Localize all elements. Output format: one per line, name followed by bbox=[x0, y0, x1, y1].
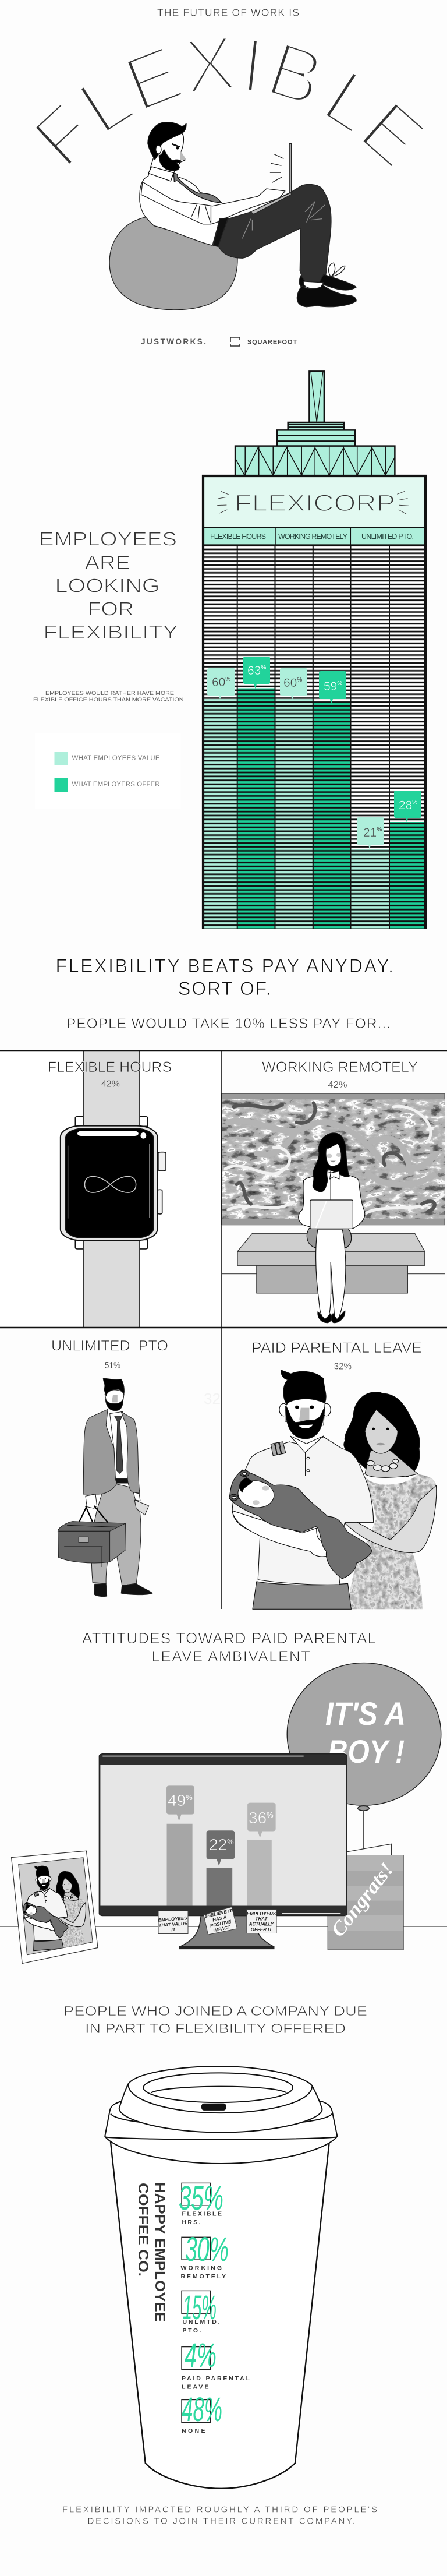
placket bbox=[305, 1446, 306, 1476]
value: 49%: 49 bbox=[168, 1791, 186, 1809]
bubble shape 36% bbox=[247, 1803, 276, 1838]
watch crown buttons bbox=[158, 1152, 166, 1171]
baby face bbox=[233, 1477, 279, 1511]
family picture in frame bbox=[23, 1865, 86, 1952]
illustration: congrats card bbox=[327, 1844, 403, 1950]
neck bbox=[331, 1163, 339, 1175]
screen glints bbox=[102, 1756, 340, 1914]
text: rather have flexible hours than vacation: EMPLOYEES WOULD RATHER HAVE MORE bbox=[45, 690, 174, 697]
bar: unlimited PTO employers offer 28% bbox=[389, 822, 425, 929]
collar bbox=[290, 1436, 324, 1452]
baby frog eyes bbox=[229, 1470, 249, 1501]
title: FLEXIBLE arched lettering bbox=[17, 19, 441, 184]
logo: Squarefoot bbox=[230, 337, 297, 346]
skirt bbox=[307, 1228, 352, 1248]
bubble 21%: 21 bbox=[363, 826, 377, 839]
title: FLEXIBLE arched lettering: I bbox=[237, 22, 268, 110]
bag tag bbox=[79, 1537, 88, 1543]
boarding pass bbox=[134, 1500, 149, 1515]
illustration: coffee cup bbox=[105, 2066, 337, 2489]
cheeks bbox=[327, 1153, 341, 1158]
balloon text: it's a boy: IT'S A bbox=[325, 1695, 406, 1732]
title: FLEXIBLE arched lettering: L bbox=[64, 55, 147, 151]
mother face bbox=[365, 1410, 398, 1453]
sticky note: employees that value it: THAT VALUE bbox=[158, 1921, 188, 1928]
panel: unlimited PTO bbox=[51, 1338, 168, 1597]
buttons bbox=[307, 1457, 310, 1459]
shirt bbox=[140, 168, 222, 245]
illustration: man with travel bag bbox=[58, 1378, 152, 1597]
shoes bbox=[318, 1311, 345, 1323]
father trousers bbox=[253, 1582, 351, 1609]
bubble 60%: % bbox=[297, 677, 302, 683]
exercise ball bbox=[109, 217, 237, 310]
face bbox=[326, 1144, 341, 1166]
checkbox labels bbox=[180, 2210, 250, 2434]
lid flange bbox=[105, 2101, 337, 2164]
card stripes bbox=[328, 1855, 403, 1931]
watch case bbox=[61, 1126, 157, 1240]
ear bbox=[156, 145, 161, 154]
face bbox=[105, 1390, 124, 1407]
hair bbox=[313, 1133, 349, 1192]
bubble 60% bbox=[207, 668, 235, 700]
lid dome bbox=[119, 2066, 322, 2133]
value: 36%: % bbox=[267, 1811, 274, 1819]
title: FLEXIBLE arched lettering: B bbox=[258, 25, 334, 123]
faint ghost number: 32 bbox=[204, 1390, 221, 1407]
bubble 60%: % bbox=[225, 676, 230, 683]
heading: flexibility beats pay anyday: FLEXIBILITY BEATS PAY ANYDAY. bbox=[56, 955, 393, 976]
upper tier bbox=[277, 422, 355, 446]
illustration: monitor with bar chart bbox=[99, 1754, 347, 1949]
illustration: woman with laptop on a bench before a painting bbox=[222, 1093, 445, 1323]
father torso bbox=[232, 1437, 374, 1585]
illustration: balloon bbox=[287, 1663, 441, 1856]
sip hole bbox=[202, 2104, 226, 2110]
illustration: man on exercise ball with laptop bbox=[109, 143, 356, 310]
label: working remotely: REMOTELY bbox=[180, 2273, 226, 2280]
grid vertical divider bbox=[221, 1051, 222, 1609]
lips bbox=[330, 1161, 336, 1162]
label: paid parental leave: PAID PARENTAL LEAVE bbox=[251, 1340, 422, 1356]
crown bbox=[235, 446, 395, 476]
heading: people who joined a company: PEOPLE WHO JOINED A COMPANY DUE bbox=[63, 2003, 367, 2019]
stand base bbox=[180, 1947, 274, 1949]
bar: unlimited PTO employees value 21% bbox=[350, 849, 389, 929]
sticky note: employers that actually offer it: THAT bbox=[256, 1917, 268, 1921]
abstract painting bbox=[222, 1099, 445, 1219]
heading: attitudes toward paid parental leave bbox=[82, 1629, 376, 1665]
heading: employees are looking for flexibility: LOOKING bbox=[55, 574, 159, 597]
father arm bbox=[232, 1511, 338, 1557]
bubble 21%: % bbox=[377, 827, 382, 833]
neck and face bbox=[150, 132, 186, 173]
kicker: the future of work is: THE FUTURE OF WORK IS bbox=[157, 7, 299, 19]
mother's fingers bbox=[271, 1442, 286, 1456]
father eyes bbox=[295, 1406, 314, 1409]
logo: Justworks: JUSTWORKS. bbox=[141, 337, 206, 346]
building outer walls bbox=[203, 476, 425, 929]
heading: attitudes toward paid parental leave: ATTITUDES TOWARD PAID PARENTAL bbox=[82, 1629, 376, 1647]
infinity symbol bbox=[84, 1177, 136, 1192]
title: FLEXIBLE arched lettering: E bbox=[113, 29, 193, 129]
value: 4%: 4% bbox=[185, 2337, 217, 2374]
baby hair bbox=[240, 1478, 252, 1492]
column header: flexible hours: FLEXIBLE HOURS bbox=[210, 532, 266, 541]
legend: employees value: WHAT EMPLOYEES VALUE bbox=[72, 755, 160, 762]
sticky note: believe it has a positive impact: $BELIEVE IT bbox=[204, 1908, 233, 1919]
heading: employees are looking for flexibility: ARE bbox=[85, 552, 130, 573]
balloon knot bbox=[358, 1806, 369, 1811]
eye and brow bbox=[172, 144, 180, 149]
bubble 63% bbox=[243, 657, 270, 689]
legend bbox=[35, 733, 180, 809]
jacket right bbox=[121, 1411, 140, 1493]
nose bbox=[112, 1395, 118, 1402]
text: rather have flexible hours than vacation: FLEXIBLE OFFICE HOURS THAN MORE VACATION. bbox=[33, 697, 185, 703]
lid recess bbox=[143, 2073, 293, 2102]
necklace bbox=[367, 1459, 399, 1472]
logo: Squarefoot: SQUAREFOOT bbox=[247, 339, 297, 346]
monitor screen bbox=[100, 1765, 346, 1906]
father beard bbox=[286, 1406, 324, 1439]
cup brand: happy employee coffee co: HAPPY EMPLOYEE bbox=[152, 2182, 168, 2322]
pants wrinkles bbox=[242, 202, 325, 238]
jacket left bbox=[83, 1409, 117, 1494]
bubble 59%: % bbox=[337, 680, 342, 687]
text: rather have flexible hours than vacation bbox=[33, 690, 185, 703]
travel bag bbox=[58, 1522, 126, 1563]
value: 22%: 22 bbox=[209, 1836, 227, 1854]
heading: employees are looking for flexibility bbox=[39, 528, 178, 643]
label: flexible hrs bbox=[182, 2210, 222, 2226]
grid lines bbox=[0, 1051, 447, 1328]
windows and data columns bbox=[204, 545, 425, 929]
label: unlmtd pto: UNLMTD. bbox=[183, 2319, 220, 2326]
bubble 59% bbox=[319, 671, 346, 704]
bag handles bbox=[74, 1506, 108, 1532]
handwritten values bbox=[179, 2179, 229, 2429]
sticky note: believe it has a positive impact: IMPACT bbox=[212, 1924, 232, 1933]
sticky note: employees that value it: IT bbox=[171, 1927, 176, 1932]
bubble 28% bbox=[394, 791, 421, 823]
bench bbox=[237, 1233, 425, 1251]
heading: attitudes toward paid parental leave: LEAVE AMBIVALENT bbox=[151, 1647, 310, 1665]
cup brand: happy employee coffee co: COFFEE CO. bbox=[135, 2183, 151, 2277]
mother chest bbox=[365, 1451, 418, 1477]
monitor body bbox=[99, 1754, 347, 1915]
father hair bbox=[281, 1370, 326, 1404]
heading: employees are looking for flexibility: FOR bbox=[87, 598, 134, 620]
label: working remotely: WORKING REMOTELY bbox=[262, 1059, 418, 1075]
mother hair bbox=[344, 1392, 420, 1477]
value: 51%: 51% bbox=[105, 1361, 120, 1371]
subheading: people would take 10% less pay for: PEOPLE WOULD TAKE 10% LESS PAY FOR... bbox=[66, 1016, 391, 1032]
checkboxes bbox=[182, 2183, 211, 2422]
bubble 28%: % bbox=[412, 799, 417, 806]
label: working remotely bbox=[180, 2265, 226, 2280]
value: 49%: % bbox=[186, 1793, 193, 1802]
card front bbox=[328, 1855, 403, 1950]
cup body bbox=[111, 2142, 329, 2489]
screen highlights bbox=[77, 1131, 139, 1136]
value: 36%: 36 bbox=[249, 1809, 267, 1827]
legs bbox=[316, 1229, 346, 1319]
baby body bbox=[229, 1470, 372, 1579]
sign: Flexicorp: FLEXICORP bbox=[235, 491, 395, 516]
hands bbox=[86, 1492, 140, 1508]
antenna bbox=[309, 371, 324, 422]
sticky note: employees that value it bbox=[158, 1911, 189, 1934]
mother dress bbox=[349, 1474, 436, 1609]
forearm bbox=[141, 182, 285, 224]
card back flap bbox=[328, 1844, 391, 1855]
mother eyes and lips bbox=[372, 1428, 389, 1430]
belt bbox=[213, 218, 228, 246]
data bubbles bbox=[207, 657, 421, 850]
value: 35%: 35% bbox=[179, 2179, 224, 2217]
belt bbox=[115, 1478, 128, 1483]
bar: working remotely employers offer 59% bbox=[313, 703, 350, 929]
hair bbox=[148, 122, 186, 160]
father's smile bbox=[299, 1424, 313, 1428]
bubble 28%: 28 bbox=[399, 799, 412, 812]
laptop bbox=[310, 1200, 353, 1229]
watch lugs bbox=[75, 1117, 148, 1249]
collar bbox=[148, 167, 173, 181]
sticky note: believe it has a positive impact: POSITIVE bbox=[210, 1919, 232, 1929]
handwritten values: 15% bbox=[183, 2289, 217, 2327]
heading: people who joined a company bbox=[63, 2003, 367, 2036]
card text: congrats: Congrats! bbox=[327, 1859, 398, 1941]
collar bbox=[330, 1171, 339, 1179]
tie bbox=[141, 195, 205, 204]
monitor stand bbox=[180, 1915, 274, 1947]
bubble 21% bbox=[357, 817, 384, 850]
panel: working remotely bbox=[222, 1059, 445, 1323]
label: paid parental leave bbox=[182, 2375, 250, 2391]
balloon body bbox=[287, 1663, 441, 1805]
sticky note: believe it has a positive impact: HAS A bbox=[212, 1915, 227, 1923]
shirt bbox=[110, 1411, 128, 1478]
sticky note: employers that actually offer it: EMPLOYERS bbox=[247, 1911, 276, 1917]
panel: paid parental leave bbox=[204, 1340, 437, 1609]
title: FLEXIBLE arched lettering: L bbox=[309, 54, 393, 150]
heading: flexibility beats pay anyday: SORT OF. bbox=[178, 978, 271, 999]
nose bbox=[180, 150, 186, 160]
photo frame bbox=[12, 1851, 98, 1963]
torso bbox=[299, 1172, 365, 1228]
legend: employers offer bbox=[55, 778, 159, 792]
bubble shape 49% bbox=[166, 1785, 194, 1821]
shoes bbox=[299, 274, 356, 290]
heading: flexibility beats pay anyday bbox=[56, 955, 393, 999]
bar: working remotely employees value 60% bbox=[275, 699, 313, 929]
sticky note: employers that actually offer it: OFFER IT bbox=[251, 1927, 272, 1932]
baby cheeks bbox=[253, 1486, 269, 1505]
icon: squarefoot bracket bbox=[230, 337, 240, 346]
sticky note: employers that actually offer it: ACTUALLY bbox=[249, 1921, 274, 1927]
bar: believe it has positive impact 22% bbox=[207, 1868, 232, 1906]
label: flexible hrs: HRS. bbox=[182, 2219, 201, 2226]
floor line bbox=[222, 1273, 445, 1275]
sign panel bbox=[204, 477, 425, 528]
footer note: FLEXIBILITY IMPACTED ROUGHLY A THIRD OF PEOPLE'S bbox=[62, 2505, 377, 2514]
value: 42%: 42% bbox=[328, 1080, 347, 1090]
value: 22%: % bbox=[227, 1837, 234, 1846]
illustration: balloon: BOY ! bbox=[328, 1733, 405, 1770]
hair bbox=[103, 1378, 124, 1396]
heading: employees are looking for flexibility: FLEXIBILITY bbox=[43, 621, 178, 643]
skyscraper top bbox=[204, 371, 425, 545]
value: 32%: 32% bbox=[334, 1362, 352, 1372]
value: 48%: 48% bbox=[182, 2391, 222, 2429]
title: FLEXIBLE arched lettering: E bbox=[344, 84, 441, 184]
tie bbox=[173, 173, 221, 203]
shoelace bbox=[329, 263, 345, 277]
laptop motion rays bbox=[270, 154, 283, 182]
title: FLEXIBLE arched lettering: F bbox=[17, 87, 111, 184]
label: flexible hours: FLEXIBLE HOURS bbox=[48, 1059, 172, 1075]
bubble 60%: 60 bbox=[283, 676, 297, 690]
bubble 60% bbox=[280, 668, 307, 700]
pants bbox=[218, 184, 331, 283]
bar: employees that value it 49% bbox=[167, 1824, 193, 1906]
title: FLEXIBLE arched lettering: X bbox=[180, 19, 240, 111]
panel: flexible hours bbox=[0, 1051, 221, 1328]
sticky note: employees that value it: EMPLOYEES bbox=[158, 1915, 187, 1923]
illustration: framed family photo bbox=[12, 1851, 98, 1963]
label: unlimited PTO: UNLIMITED PTO bbox=[51, 1338, 168, 1354]
bubble 63%: 63 bbox=[247, 664, 261, 677]
bubble 59%: 59 bbox=[324, 680, 337, 693]
column header: unlimited PTO: UNLIMITED PTO. bbox=[361, 532, 414, 541]
illustration: man's head bbox=[148, 122, 221, 203]
painting frame bbox=[222, 1093, 445, 1225]
sock bbox=[303, 281, 324, 288]
beard bbox=[159, 150, 181, 171]
cup brand: happy employee coffee co bbox=[135, 2182, 168, 2322]
label: working remotely: WORKING bbox=[180, 2265, 222, 2272]
father face bbox=[285, 1397, 325, 1425]
label: unlmtd pto bbox=[183, 2319, 220, 2334]
bubble 63%: % bbox=[261, 665, 266, 671]
father ears bbox=[279, 1403, 288, 1416]
bar: employers that offer it 36% bbox=[247, 1840, 272, 1906]
father nose bbox=[299, 1408, 309, 1423]
tie bbox=[115, 1417, 123, 1473]
watch strap bbox=[83, 1051, 140, 1328]
bubble shape 22% bbox=[207, 1830, 235, 1866]
mother arm bbox=[345, 1485, 437, 1552]
label: unlmtd pto: PTO. bbox=[183, 2327, 201, 2334]
watch screen bbox=[66, 1128, 154, 1238]
label: flexible hrs: FLEXIBLE bbox=[182, 2210, 222, 2217]
footer note bbox=[62, 2505, 377, 2526]
column header: working remotely: WORKING REMOTELY bbox=[278, 532, 348, 541]
icon: smart watch bbox=[61, 1051, 166, 1328]
heading: people who joined a company: IN PART TO FLEXIBILITY OFFERED bbox=[85, 2021, 346, 2036]
label: none: NONE bbox=[182, 2427, 205, 2434]
footer note: DECISIONS TO JOIN THEIR CURRENT COMPANY. bbox=[87, 2517, 355, 2526]
legend: employees value bbox=[55, 752, 160, 765]
value: 30%: 30% bbox=[185, 2231, 229, 2268]
label: paid parental leave: PAID PARENTAL bbox=[182, 2375, 250, 2382]
value: 42%: 42% bbox=[101, 1079, 120, 1089]
header row bbox=[204, 528, 425, 545]
sticky note: employers that actually offer it bbox=[247, 1910, 276, 1933]
sleeve folds bbox=[191, 205, 211, 224]
floor line bbox=[0, 1926, 447, 1927]
sticky note: believe it has a positive impact bbox=[204, 1907, 237, 1935]
shoes bbox=[94, 1583, 152, 1597]
lid ledge bbox=[128, 2084, 312, 2113]
illustration: family with baby bbox=[229, 1370, 437, 1609]
sign rays bbox=[217, 491, 409, 514]
bar: flexible hours employers offer 63% bbox=[237, 689, 275, 929]
bubble 60%: 60 bbox=[212, 676, 225, 689]
legend: employers offer: WHAT EMPLOYERS OFFER bbox=[72, 781, 159, 788]
photo background bbox=[19, 1858, 93, 1955]
label: paid parental leave: LEAVE bbox=[182, 2384, 208, 2391]
beard bbox=[105, 1399, 123, 1411]
trousers bbox=[91, 1484, 141, 1586]
heading: employees are looking for flexibility: EMPLOYEES bbox=[39, 528, 177, 550]
painting brush strokes bbox=[225, 1103, 442, 1213]
balloon string bbox=[363, 1810, 364, 1856]
chart: Flexicorp skyscraper bbox=[203, 371, 425, 929]
laptop bbox=[251, 143, 292, 214]
bar: flexible hours employees value 60% bbox=[204, 699, 237, 929]
